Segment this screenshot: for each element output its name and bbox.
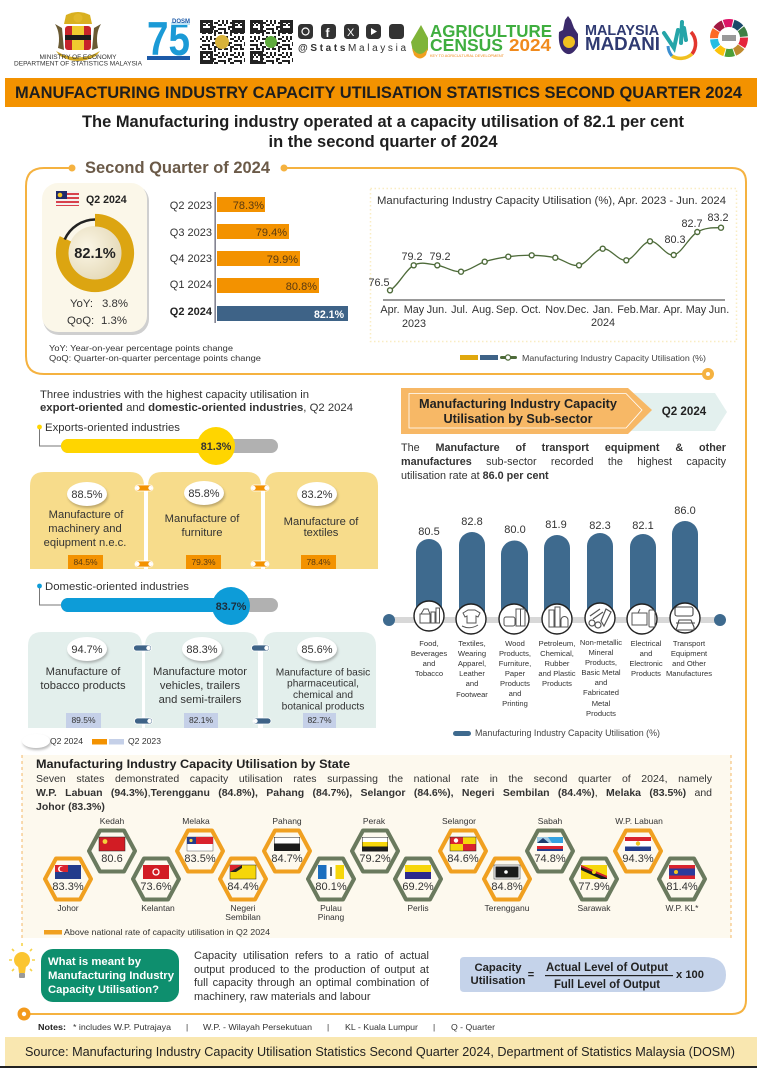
data labels: 83.2 [707, 212, 729, 224]
state: Kelantan [133, 858, 179, 913]
sub-sector labels: Transport [673, 639, 706, 648]
state: Kelantan: 73.6% [140, 881, 172, 893]
text: sub-sector summary: manufactures sub-sector recorded the highest capacity [401, 456, 726, 468]
panel: domestic-oriented industries [28, 632, 376, 728]
sub-sector labels: Petroleum, [539, 639, 575, 648]
bar: food [414, 526, 444, 631]
bar: transport: 86.0 [674, 505, 696, 517]
data markers [388, 225, 724, 293]
sub-sector labels: and [640, 649, 652, 658]
bar: Q3 2023: Q3 2023 [170, 227, 212, 239]
state: Selangor: Selangor [442, 816, 476, 826]
month axis labels: Nov. [545, 304, 567, 316]
state: Perak [352, 816, 398, 872]
QR code 2 [250, 20, 293, 64]
banner: sub-sector heading: Utilisation by Sub-sector [444, 411, 593, 426]
sub-sector labels: Wood [505, 639, 525, 648]
sub-sector labels: Non-metallic [580, 638, 622, 647]
formula: = [528, 969, 534, 981]
state: Pulau Pinang: Pulau [320, 903, 342, 913]
month axis labels: Sep. [496, 304, 518, 316]
text: state summary [36, 773, 712, 813]
card label: Q2 2024 [86, 194, 127, 206]
state: Perak: Perak [363, 816, 386, 826]
header logos [14, 12, 744, 68]
logo: Malaysia Madani: MADANI [585, 34, 660, 54]
text: definition of capacity utilisation: machinery, raw materials and labour [194, 991, 370, 1003]
heading: top three industries: export-oriented and domestic-oriented industries , Q2 2024 [40, 402, 353, 414]
icon: Malaysia flag [56, 191, 79, 206]
data labels: 79.2 [401, 251, 423, 263]
state: Negeri Sembilan [220, 858, 266, 922]
callout: definition question: Capacity Utilisation? [48, 984, 159, 996]
state: Negeri Sembilan: Sembilan [225, 912, 261, 922]
state: Pulau Pinang: Pinang [318, 912, 345, 922]
state: W.P. Labuan: 94.3% [622, 853, 654, 865]
state: Sabah [527, 816, 573, 872]
text: definition of capacity utilisation [194, 950, 429, 1003]
YoY QoQ definitions [49, 343, 261, 363]
sub-sector labels: Equipment [671, 649, 708, 658]
state: W.P. Labuan: W.P. Labuan [615, 816, 663, 826]
bar: Q2 2024 [170, 306, 348, 321]
social handle: @Stats Malaysia [298, 43, 406, 54]
month axis labels: May [404, 304, 425, 316]
card: tobacco: 94.7% [71, 644, 103, 656]
bar: Q4 2023 [170, 251, 300, 266]
bar: Q2 2024: Q2 2024 [170, 306, 213, 318]
panel heading: Manufacturing Industry Capacity Utilisation by State [36, 757, 350, 771]
notes: KL - Kuala Lumpur [345, 1022, 418, 1032]
card: textiles [265, 472, 378, 569]
state: Pulau Pinang: 80.1% [315, 881, 347, 893]
YoY QoQ definitions: YoY: Year-on-year percentage points change [49, 343, 233, 353]
sub-sector labels: Products [542, 679, 572, 688]
card: tobacco: Manufacture of [46, 666, 121, 678]
section heading: Second Quarter of 2024 [85, 159, 271, 177]
card: pharmaceutical [263, 632, 376, 728]
month axis labels [380, 304, 729, 330]
state: W.P. KL [659, 858, 705, 913]
bar: Q4 2023: 79.9% [267, 254, 298, 266]
notes: | [433, 1022, 435, 1032]
bar: Q1 2024 [170, 278, 319, 293]
card: furniture: Manufacture of [165, 513, 240, 525]
logo: Agriculture Census 2024: CENSUS [430, 35, 503, 55]
card: machinery and equipment [30, 472, 144, 569]
formula [460, 957, 726, 992]
bar: Q2 2023 [170, 197, 265, 212]
social media icons [298, 24, 404, 40]
line chart: monthly capacity utilisation [368, 188, 736, 342]
logo: DOSM 75: 75 [147, 12, 190, 65]
text: sub-sector summary [401, 442, 726, 482]
card: furniture: 85.8% [188, 488, 220, 500]
sub-sector labels: Products [586, 709, 616, 718]
notes: * includes W.P. Putrajaya [73, 1022, 171, 1032]
QR code 1 [200, 20, 245, 64]
progress bar: exports-oriented [37, 422, 278, 465]
month axis labels: Jul. [451, 304, 468, 316]
sub-sector labels: and [595, 678, 607, 687]
text: definition of capacity utilisation: output produced to the production of output at [194, 964, 429, 976]
card: tobacco: tobacco products [40, 680, 126, 692]
headline: in the second quarter of 2024 [268, 133, 498, 151]
title band: MANUFACTURING INDUSTRY CAPACITY UTILISATION STATISTICS SECOND QUARTER 2024 [15, 83, 743, 102]
card: pharmaceutical: botanical products [282, 702, 364, 712]
state: Kedah [89, 816, 135, 872]
sub-sector labels: Footwear [456, 690, 488, 699]
state: Melaka [177, 816, 223, 872]
sub-sector labels [411, 638, 712, 718]
sub-sector labels: Tobacco [415, 669, 443, 678]
card: motor vehicles: and semi-trailers [159, 694, 242, 706]
sub-sector labels: Beverages [411, 649, 447, 658]
state: Terengganu [484, 858, 530, 913]
donut chart [62, 220, 128, 286]
month axis labels: 2023 [402, 318, 426, 330]
sub-sector labels: and Other [672, 659, 706, 668]
text: state summary: Johor (83.3%) [36, 801, 105, 813]
YoY and QoQ values: QoQ: [67, 315, 94, 327]
sub-sector labels: and [423, 659, 435, 668]
state: Sabah: Sabah [538, 816, 563, 826]
text: sub-sector summary: The Manufacture of transport equipment & other [401, 442, 726, 454]
headline [82, 113, 685, 151]
notes: Notes: [38, 1022, 66, 1032]
state: Selangor: 84.6% [447, 853, 479, 865]
bar: Q1 2024: Q1 2024 [170, 279, 212, 291]
text: sub-sector summary: utilisation rate at 86.0 per cent [401, 470, 549, 482]
logo: Agriculture Census 2024: AGRICULTURE [430, 21, 552, 41]
state: W.P. Labuan [615, 816, 663, 872]
source band: Source: Manufacturing Industry Capacity Utilisation Statistics Second Quarter 2024, Department of Statistics Malaysia (DOSM) [25, 1045, 735, 1059]
bar: Q3 2023 [170, 224, 289, 239]
bar: electrical: 82.1 [632, 520, 654, 532]
legend: sub-sector chart: Manufacturing Industry Capacity Utilisation (%) [475, 728, 660, 738]
state: Negeri Sembilan: 84.4% [227, 881, 259, 893]
data labels: 82.7 [681, 218, 703, 230]
card: machinery and equipment: machinery and [48, 523, 122, 535]
YoY and QoQ values: YoY: [70, 298, 93, 310]
state: Negeri Sembilan: Negeri [230, 903, 256, 913]
ministry name: DEPARTMENT OF STATISTICS MALAYSIA [14, 60, 143, 68]
sub-sector labels: Basic Metal [581, 668, 621, 677]
title band [5, 78, 757, 107]
YoY and QoQ values [67, 298, 128, 327]
sub-sector labels: Electronic [629, 659, 663, 668]
bar: Q4 2023: Q4 2023 [170, 253, 212, 265]
sub-sector labels: Products, [499, 649, 531, 658]
card: pharmaceutical: 82.7% [307, 715, 332, 725]
sub-sector labels: Electrical [631, 639, 662, 648]
state: Sarawak: 77.9% [578, 881, 610, 893]
progress bar: exports-oriented: 81.3% [201, 441, 232, 453]
card: pharmaceutical: pharmaceutical, [287, 678, 359, 690]
progress bar: domestic-oriented: Domestic-oriented industries [45, 581, 190, 593]
sub-sector labels: Wearing [458, 649, 486, 658]
sub-sector labels: Furniture, [499, 659, 531, 668]
logo: SDG wheel [714, 23, 744, 53]
section frame with timeline dots [18, 164, 746, 1020]
logo: Agriculture Census 2024: 2024 [509, 35, 551, 55]
data labels: 80.3 [664, 234, 686, 246]
state: Johor [45, 858, 91, 913]
card: textiles: textiles [304, 527, 339, 539]
sub-sector labels: and [466, 679, 478, 688]
card: motor vehicles: 88.3% [186, 644, 218, 656]
logo: statistics mark [664, 22, 696, 58]
state: Pahang [264, 816, 310, 872]
banner: sub-sector heading [401, 388, 727, 434]
card: furniture: furniture [181, 527, 223, 539]
formula: Actual Level of Output [546, 961, 668, 974]
data labels: 79.2 [429, 251, 451, 263]
banner: sub-sector heading: Q2 2024 [662, 405, 707, 418]
legend: quarters: Q2 2023 [128, 736, 161, 746]
month axis labels: Feb. [617, 304, 639, 316]
card: furniture [148, 472, 261, 569]
card: textiles: Manufacture of [284, 516, 359, 528]
sub-sector labels: and [509, 689, 521, 698]
legend: above national rate: Above national rate of capacity utilisation in Q2 2024 [64, 927, 270, 937]
card connectors [134, 645, 271, 724]
panel: Q2 2024 summary card [42, 183, 149, 335]
formula: x 100 [676, 969, 704, 981]
month axis labels: Jan. [593, 304, 613, 316]
sub-sector labels: Products, [585, 658, 617, 667]
sub-sector labels: and Plastic [538, 669, 576, 678]
sub-sector labels: Paper [505, 669, 526, 678]
notes: W.P. - Wilayah Persekutuan [203, 1022, 312, 1032]
bar: non-metallic [585, 520, 615, 633]
bar: electrical [627, 520, 657, 634]
legend: quarters [22, 734, 161, 750]
heading: top three industries: Three industries with the highest capacity utilisation in [40, 389, 309, 401]
card: motor vehicles: Manufacture motor [153, 666, 247, 678]
icon: coat of arms [55, 12, 101, 61]
callout: definition question: What is meant by [48, 956, 142, 968]
card: pharmaceutical: Manufacture of basic [276, 668, 370, 678]
state: Johor: Johor [57, 903, 79, 913]
data labels [368, 212, 729, 289]
card: pharmaceutical: chemical and [293, 690, 353, 701]
card: textiles: 83.2% [301, 489, 333, 501]
donut chart: 82.1% [74, 246, 116, 262]
bar: non-metallic: 82.3 [589, 520, 611, 532]
icon: lightbulb [9, 943, 35, 978]
progress bar: exports-oriented: Exports-oriented industries [45, 422, 181, 434]
sub-sector labels: Products [631, 669, 661, 678]
sub-sector labels: Rubber [545, 659, 570, 668]
month axis labels: Aug. [472, 304, 494, 316]
social media icons: f [326, 26, 330, 40]
ministry name [14, 54, 143, 68]
bar: food: 80.5 [418, 526, 440, 538]
sub-sector labels: Apparel, [458, 659, 486, 668]
YoY QoQ definitions: QoQ: Quarter-on-quarter percentage points change [49, 353, 261, 363]
chart title: Manufacturing Industry Capacity Utilisation (%), Apr. 2023 - Jun. 2024 [377, 195, 726, 207]
month axis labels: Apr. [663, 304, 683, 316]
state: Kelantan: Kelantan [141, 903, 175, 913]
sub-sector labels: Manufactures [666, 669, 712, 678]
YoY and QoQ values: 3.8% [102, 298, 128, 310]
state: Pulau Pinang [308, 858, 354, 922]
text: state summary: Seven states demonstrated capacity utilisation rates surpassing the national rate in the second quarter of 2024, namely [36, 773, 712, 785]
bar: wood [499, 524, 529, 634]
state: Perlis [395, 858, 441, 913]
state: Johor: 83.3% [52, 881, 84, 893]
legend: quarters: Q2 2024 [50, 736, 83, 746]
sub-sector labels: Textiles, [458, 639, 486, 648]
sub-sector labels: Leather [459, 669, 485, 678]
state: Perlis: 69.2% [402, 881, 434, 893]
formula: Full Level of Output [554, 978, 660, 991]
notes: | [327, 1022, 329, 1032]
sub-sector labels: Printing [502, 699, 528, 708]
card: machinery and equipment: Manufacture of [49, 509, 124, 521]
data labels: 76.5 [368, 277, 390, 289]
heading: top three industries [40, 389, 353, 414]
logo: DOSM 75: DOSM [172, 19, 190, 25]
bar: petroleum: 81.9 [545, 519, 567, 531]
card: machinery and equipment: 88.5% [71, 489, 103, 501]
text: definition of capacity utilisation: Capacity utilisation refers to a ratio of actual [194, 950, 429, 962]
notes: | [186, 1022, 188, 1032]
state: Melaka: Melaka [182, 816, 210, 826]
bar: Q3 2023: 79.4% [256, 227, 287, 239]
callout: definition question: Manufacturing Industry [48, 970, 175, 982]
month axis labels: Jun. [709, 304, 729, 316]
sub-sector labels: Food, [419, 639, 439, 648]
logo: Agriculture Census 2024: KEY TO AGRICULTURAL DEVELOPMENT [430, 53, 505, 58]
bar chart: quarterly capacity utilisation [170, 192, 348, 323]
text: state summary: W.P. Labuan (94.3%),Terengganu (84.8%), Pahang (84.7%), Selangor (84.6%), Negeri Sembilan (84.4%), Melaka (83.5%) and [36, 787, 712, 799]
card: motor vehicles: 82.1% [189, 715, 213, 725]
month axis labels: Dec. [567, 304, 589, 316]
notes [38, 1022, 495, 1032]
state: Terengganu: Terengganu [485, 903, 530, 913]
notes: Q - Quarter [451, 1022, 495, 1032]
month axis labels: Oct. [521, 304, 541, 316]
state: Pahang: 84.7% [271, 853, 303, 865]
card: furniture: 79.3% [191, 557, 216, 567]
bar: transport [670, 505, 700, 633]
state: Pahang: Pahang [272, 816, 302, 826]
chart legend: Manufacturing Industry Capacity Utilisation (%) [522, 353, 706, 363]
state: Sarawak: Sarawak [577, 903, 611, 913]
sub-sector labels: Chemical, [540, 649, 574, 658]
panel: exports-oriented industries [30, 472, 378, 569]
state: Perlis: Perlis [407, 903, 429, 913]
ministry name: MINISTRY OF ECONOMY [40, 54, 117, 61]
headline: The Manufacturing industry operated at a capacity utilisation of 82.1 per cent [82, 113, 685, 131]
state: Melaka: 83.5% [184, 853, 216, 865]
card: tobacco [28, 632, 142, 728]
progress bar: domestic-oriented [37, 581, 278, 625]
bar: wood: 80.0 [504, 524, 526, 536]
callout: definition question [41, 949, 179, 1002]
progress bar: domestic-oriented: 83.7% [216, 601, 247, 613]
card: textiles: 78.4% [306, 557, 331, 567]
lollipop bar chart: sub-sectors [383, 505, 726, 718]
state: Terengganu: 84.8% [491, 881, 523, 893]
formula: Capacity [474, 962, 522, 974]
bar: Q2 2023: 78.3% [233, 200, 264, 212]
state: Perak: 79.2% [359, 853, 391, 865]
social media icons: X [347, 27, 355, 39]
text: definition of capacity utilisation: full capacity through an optimal combination of [194, 977, 429, 989]
card: machinery and equipment: eqiupment n.e.c. [44, 537, 126, 549]
state: Kedah: Kedah [100, 816, 125, 826]
source band [0, 1037, 757, 1068]
month axis labels: Mar. [640, 304, 660, 316]
state: W.P. KL: 81.4% [666, 881, 698, 893]
card: machinery and equipment: 84.5% [73, 557, 98, 567]
banner: sub-sector heading: Manufacturing Industry Capacity [419, 396, 618, 411]
state: Sabah: 74.8% [534, 853, 566, 865]
bar: textiles: 82.8 [461, 516, 483, 528]
sub-sector labels: Mineral [589, 648, 614, 657]
bar: Q2 2023: Q2 2023 [170, 200, 212, 212]
card: motor vehicles [145, 632, 258, 728]
month axis labels: 2024 [591, 317, 615, 329]
card: pharmaceutical: 85.6% [301, 644, 333, 656]
month axis labels: May [686, 304, 707, 316]
bar: Q2 2024: 82.1% [314, 309, 345, 321]
state: Kedah: 80.6 [101, 853, 123, 865]
logo: Agriculture Census 2024 [411, 21, 552, 58]
month axis labels: Jun. [427, 304, 447, 316]
state: Sarawak [571, 858, 617, 913]
card: motor vehicles: vehicles, trailers [160, 680, 241, 692]
sub-sector labels: Metal [592, 699, 611, 708]
card: tobacco: 89.5% [71, 715, 96, 725]
logo: Malaysia Madani [559, 16, 660, 54]
card connectors [135, 485, 269, 567]
bar: petroleum [542, 519, 572, 634]
bar: textiles [456, 516, 486, 634]
month axis labels: Apr. [380, 304, 400, 316]
sub-sector labels: Products [500, 679, 530, 688]
bar: Q1 2024: 80.8% [286, 281, 317, 293]
logo: Malaysia Madani: MALAYSIA [585, 22, 659, 39]
formula: Utilisation [470, 975, 526, 987]
state: W.P. KL: W.P. KL* [666, 903, 699, 913]
panel: capacity utilisation by state [22, 755, 731, 938]
sub-sector labels: Fabricated [583, 688, 619, 697]
state: Selangor [440, 816, 486, 872]
YoY and QoQ values: 1.3% [101, 315, 127, 327]
